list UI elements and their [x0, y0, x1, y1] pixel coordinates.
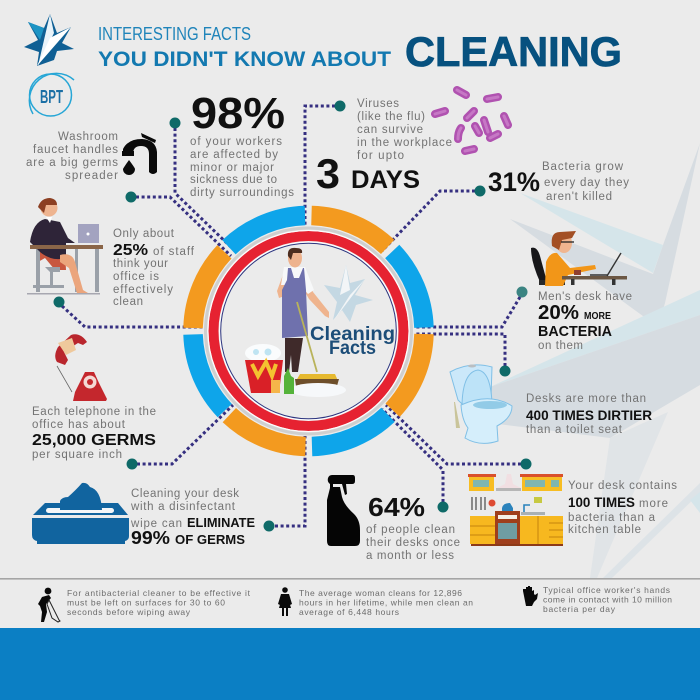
- central ring: [145, 168, 472, 494]
- fact: viruses: DAYS: [351, 166, 420, 194]
- fact: viruses: in the workplace: [357, 137, 452, 149]
- fact: 98 percent: [190, 89, 294, 199]
- logo: BPT badge: [29, 73, 74, 116]
- fact: 25 percent: office is: [113, 271, 159, 283]
- divider: [0, 578, 700, 580]
- fact: men's desk: BACTERIA: [538, 323, 612, 340]
- fact: 25 percent: clean: [113, 296, 143, 308]
- connector dots: [54, 100, 532, 532]
- fact: disinfectant wipe: with a disinfectant: [130, 501, 236, 513]
- fact: disinfectant wipe: 99%: [131, 528, 170, 548]
- fact: telephone: Each telephone in the: [32, 406, 156, 418]
- title: YOU DIDN'T KNOW ABOUT: [98, 48, 391, 71]
- icon: virus cluster: [435, 90, 508, 151]
- title: INTERESTING FACTS: [98, 24, 251, 44]
- fact: 25 percent: of staff: [153, 246, 195, 258]
- icon: woman silhouette: [278, 587, 292, 616]
- fact: desks dirtier: Desks are more than: [526, 393, 646, 405]
- note: hours cleaning: average of 6,448 hours: [299, 607, 399, 617]
- fact: 31 percent: Bacteria grow: [542, 161, 624, 173]
- center label: [310, 324, 395, 359]
- note: hours cleaning: [299, 588, 473, 617]
- fact: faucet: Washroom: [58, 131, 118, 143]
- title: [98, 24, 622, 75]
- fact: 64 percent: [366, 492, 460, 562]
- fact: faucet: [26, 131, 118, 182]
- fact: telephone: [32, 406, 156, 461]
- fact: viruses: for upto: [357, 150, 404, 162]
- fact: men's desk: [538, 291, 632, 352]
- icon: toilet: [450, 364, 512, 443]
- fact: disinfectant wipe: ELIMINATE: [187, 516, 255, 530]
- center label: Cleaning: [310, 324, 395, 345]
- note: hands and bacteria: [543, 585, 672, 614]
- note: antibacterial cleaner: For antibacterial cleaner to be effective it: [67, 588, 251, 598]
- fact: 31 percent: [488, 161, 629, 203]
- note: antibacterial cleaner: must be left on surfaces for 30 to 60: [67, 598, 225, 608]
- title: CLEANING: [405, 28, 622, 75]
- fact: men's desk: Men's desk have: [538, 291, 632, 303]
- fact: disinfectant wipe: OF GERMS: [175, 532, 245, 547]
- fact: telephone: per square inch: [32, 449, 122, 461]
- fact: 25 percent: Only about: [113, 228, 175, 240]
- fact: men's desk: MORE: [584, 310, 611, 322]
- fact: 98 percent: of your workers: [190, 136, 282, 148]
- fact: disinfectant wipe: [130, 488, 255, 548]
- logo: BPT badge: BPT: [40, 87, 63, 107]
- fact: desks dirtier: [526, 393, 652, 436]
- fact: 98 percent: minor or major: [190, 162, 274, 174]
- fact: 31 percent: 31%: [488, 167, 540, 197]
- icon: faucet: [122, 133, 157, 175]
- icon: woman at desk: [27, 198, 103, 294]
- note: hands and bacteria: bacteria per day: [543, 604, 616, 614]
- dotted connectors: [62, 106, 521, 526]
- fact: viruses: 3: [316, 150, 340, 197]
- fact: 98 percent: 98%: [191, 89, 285, 138]
- fact: 25 percent: think your: [113, 258, 168, 270]
- note: hands and bacteria: Typical office worker's hands: [543, 585, 670, 595]
- fact: 98 percent: sickness due to: [190, 174, 277, 186]
- fact: 98 percent: are affected by: [190, 149, 278, 161]
- note: antibacterial cleaner: seconds before wiping away: [67, 607, 191, 617]
- fact: 25 percent: [113, 228, 195, 308]
- fact: desk vs kitchen: more: [639, 498, 668, 510]
- note: antibacterial cleaner: [67, 588, 251, 617]
- illustration: bucket and bottles: [245, 344, 294, 394]
- fact: 64 percent: 64%: [368, 492, 425, 522]
- fact: men's desk: 20%: [538, 302, 579, 324]
- icon: man at desk: [531, 231, 627, 286]
- fact: desk vs kitchen: Your desk contains: [568, 480, 677, 492]
- icon: wipes box: [32, 483, 129, 544]
- icon: kitchen: [468, 474, 563, 546]
- icon: telephone: [55, 334, 107, 401]
- note: hands and bacteria: come in contact with 10 million: [543, 594, 672, 604]
- illustration: faint star: [324, 265, 373, 322]
- fact: disinfectant wipe: Cleaning your desk: [131, 488, 239, 500]
- center label: Facts: [329, 338, 376, 359]
- fact: telephone: 25,000 GERMS: [32, 432, 156, 449]
- fact: viruses: (like the flu): [357, 111, 425, 123]
- note: hours cleaning: The average woman cleans for 12,896: [299, 588, 462, 598]
- fact: telephone: office has about: [32, 419, 126, 431]
- logo: star: [24, 14, 74, 66]
- illustration: cleaner with mop: [277, 248, 346, 397]
- icon: spray bottle: [327, 475, 360, 546]
- fact: 64 percent: a month or less: [366, 550, 454, 562]
- fact: 25 percent: effectively: [113, 284, 173, 296]
- icon: mopping silhouette: [38, 588, 60, 622]
- fact: faucet: faucet handles: [33, 144, 118, 156]
- fact: desk vs kitchen: 100 TIMES: [568, 495, 635, 510]
- fact: desks dirtier: than a toilet seat: [526, 424, 623, 436]
- fact: disinfectant wipe: wipe can: [130, 518, 182, 530]
- fact: desk vs kitchen: bacteria than a: [568, 512, 656, 524]
- fact: 98 percent: dirty surroundings: [190, 187, 294, 199]
- icon: hand: [523, 586, 538, 606]
- fact: desks dirtier: 400 TIMES DIRTIER: [526, 408, 652, 423]
- fact: viruses: Viruses: [357, 98, 399, 110]
- fact: desk vs kitchen: [568, 480, 677, 536]
- footer band: [0, 628, 700, 700]
- fact: desk vs kitchen: kitchen table: [568, 524, 641, 536]
- fact: 25 percent: 25%: [113, 242, 148, 259]
- fact: faucet: are a big germs: [26, 157, 118, 169]
- fact: viruses: [316, 98, 452, 197]
- fact: 64 percent: of people clean: [366, 524, 455, 536]
- fact: faucet: spreader: [65, 170, 118, 182]
- fact: 31 percent: every day they: [544, 177, 629, 189]
- fact: 31 percent: aren't killed: [546, 191, 612, 203]
- fact: 64 percent: their desks once: [366, 537, 460, 549]
- fact: viruses: can survive: [357, 124, 423, 136]
- note: hours cleaning: hours in her lifetime, while men clean an: [299, 598, 473, 608]
- fact: men's desk: on them: [538, 340, 583, 352]
